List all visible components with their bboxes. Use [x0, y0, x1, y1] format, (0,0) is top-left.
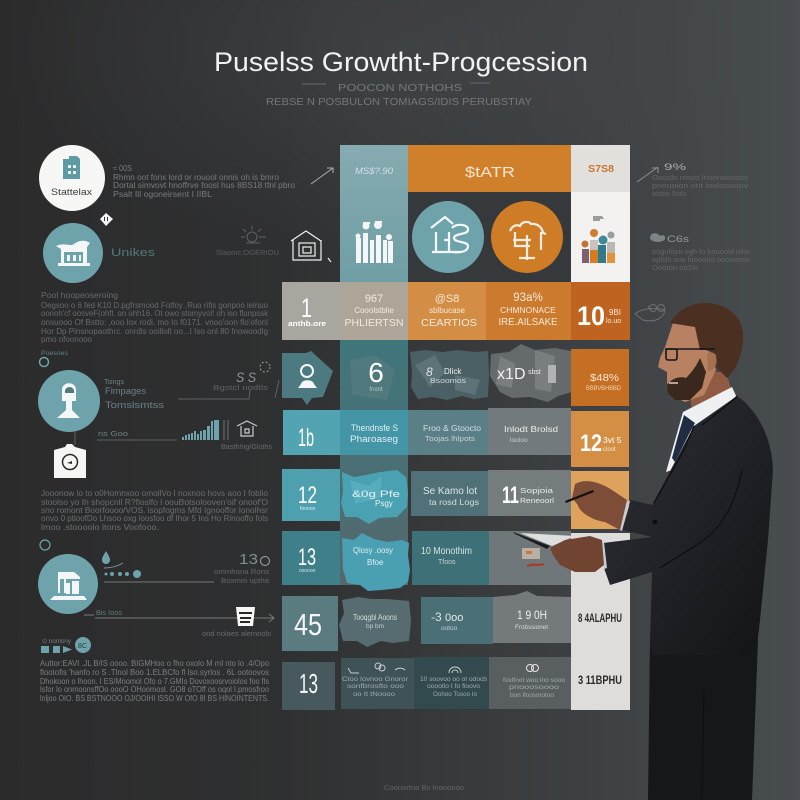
row 6: 45 — [294, 607, 322, 642]
text block: strategy: Dortal simvovt hnoffrve foosl hus 8BS18 tfnl pbro — [113, 181, 296, 190]
row 3: 3vt 5 — [603, 435, 622, 445]
cell: orange percent: $48% — [590, 373, 619, 384]
row 5: 13 — [298, 544, 316, 571]
row 3: Toojas lhlpots — [425, 434, 475, 443]
row 1: @S8 — [435, 293, 459, 305]
text block: strategy — [113, 164, 296, 199]
row 7: foxlfnot woo lno sooo — [503, 677, 565, 684]
cell: torn dark teal: 8 — [426, 365, 433, 379]
row 7: sonfbrosfto ooo — [347, 683, 404, 690]
icon: number ring: 13 — [239, 551, 258, 568]
icon: hexagon — [282, 351, 333, 405]
column: white lower panel — [571, 533, 630, 710]
row 1: anthb.ore — [288, 319, 326, 328]
icon: teal building circle — [43, 223, 103, 283]
row 4: Se Kamo lot — [423, 486, 477, 497]
icon: number ring — [239, 551, 270, 568]
face — [658, 323, 716, 402]
text block: left paragraph three: lsfor lo onmoonsffOo oooO OHoomosl. GO8 oTOff os oqol I.pmosfroo — [40, 685, 270, 694]
cell: six: fnont — [369, 387, 383, 393]
text block: left paragraph two: onvo 0 ptloofDo Lhsoo oxg ioosfoo df Ihor 5 Ins Ho Rinooffo fols — [41, 514, 268, 523]
label: stack caption: ond nolaes alemnols — [202, 629, 271, 638]
row 4 — [282, 469, 629, 529]
row 3: Inlodt Brolsd — [504, 425, 558, 434]
jacket — [603, 396, 773, 655]
icon: machine circle — [38, 554, 98, 614]
text block: left paragraph three: lnljoo OIO. BS BSTNOOO OJ/OOIHI lSSO W OfO 8I BS HINOINTENTS. — [40, 694, 269, 703]
row 4: Psgy — [375, 499, 393, 508]
icon: teal house circle — [412, 201, 484, 273]
label: sun caption: Slaomc:OGERIOU — [216, 248, 279, 257]
column: teal header and icon — [340, 145, 408, 585]
column: white stats panel: S7S8 — [588, 164, 614, 175]
cell: torn grey — [490, 344, 578, 402]
icon and note: C6s — [650, 233, 750, 272]
row 5 — [282, 531, 571, 591]
row 6: bp bm — [366, 623, 384, 630]
row 7 — [282, 657, 571, 710]
cell: orange percent: BBBVBHBBD — [586, 386, 622, 392]
cell: six: 6 — [368, 357, 384, 388]
arrow and note: percentage: 9% — [664, 162, 687, 173]
arrow: to table — [84, 614, 274, 622]
glasses — [665, 349, 715, 360]
column: white lower panel: 8 4ALAPHU — [578, 611, 622, 625]
cell: torn grey: x1 — [497, 366, 514, 383]
text block: left paragraph one — [41, 291, 269, 344]
row 6: -3 — [431, 610, 442, 624]
subtitle: REBSE N POSBULON TOMIAGS/IDIS PERUBSTIAY — [266, 97, 532, 108]
row 1: 1 — [301, 293, 312, 323]
subtitle — [266, 83, 532, 108]
icon: white tag — [54, 444, 86, 478]
icon: signs and dashes: S S — [236, 369, 257, 385]
icon: sun — [241, 226, 266, 243]
cell: torn dark teal — [410, 350, 489, 400]
icon: white strategy badge — [39, 145, 105, 211]
text block: third item label — [104, 379, 164, 411]
row 3: 12 — [580, 430, 602, 457]
title: Puselss Growtht-Progcession — [214, 47, 588, 77]
row 7: ooootlo I fo floovo — [427, 683, 480, 690]
label: ring caption: Boxmm uptha — [221, 576, 270, 585]
column: white stats panel — [571, 145, 630, 282]
legend — [41, 637, 91, 653]
row 5: oxoooo — [299, 568, 316, 574]
row 3: cloot — [603, 447, 616, 453]
cell: torn grey: D — [514, 366, 526, 383]
row 7: oo It tNoooo — [353, 691, 395, 698]
label: small heading with ring — [40, 350, 69, 366]
column: white lower panel: 3 11BPHU — [578, 673, 622, 687]
right notes — [635, 162, 750, 321]
icon: small white diamond — [100, 213, 113, 226]
label: chart caption: Basth!ng/Gloths — [221, 442, 272, 451]
icon: small building — [237, 421, 257, 436]
row 3: 1b — [298, 424, 314, 452]
cell: torn grey teal — [339, 597, 411, 647]
text block: left paragraph one: Hor Dp Pinsnopaothrc. onrdls ooillolt oo...I Iso onl 80 fnowoodlg — [41, 327, 268, 336]
row 1: sblbucase — [429, 306, 466, 315]
row 4: Sopjoia — [520, 486, 554, 495]
text block: left paragraph two: lmoo .stoooolo ltons Voofooo. — [41, 523, 159, 532]
icon: row 7 small glyphs — [348, 663, 538, 673]
label: ring caption — [214, 567, 270, 585]
text block: left paragraph three: Dhokoon o lhoon. I ES/Mnomol Ofo o 7.GMIs Dovoxoosrvoiolos foo fls — [40, 677, 269, 686]
text block: left paragraph two: stoolso yo Ih shopcnll R?fioslfo l oouBotsolooven'oif onoof'O — [41, 498, 268, 507]
row 4: &0g Pfe — [352, 489, 400, 499]
text block: left paragraph two — [41, 489, 269, 532]
tablet and lower hand — [513, 532, 604, 572]
arrow and note: percentage: pnouoion ont loolonooov — [652, 181, 748, 190]
icon: white stack — [236, 607, 255, 626]
dark cell behind circles — [408, 192, 571, 282]
text block: third item label: Fimpages — [105, 386, 146, 397]
row 1: CEARTIOS — [421, 318, 477, 329]
row 7: 13 — [299, 668, 318, 699]
cell: torn dark teal: Dlick — [444, 367, 462, 376]
row 4: Reneoorl — [520, 496, 554, 505]
label: line caption: ns Goo — [98, 429, 128, 438]
row 1 — [282, 282, 630, 340]
icon: orange hand circle — [491, 201, 563, 273]
icon and note: C6s: Oooton oo1lo — [652, 263, 698, 272]
legend: 8C — [78, 643, 87, 650]
label: ring caption: ommhona Rons — [214, 567, 269, 576]
icon: fish — [635, 304, 665, 321]
row 4: 12 — [298, 482, 317, 509]
label: signs caption: Bgstcl nodtls — [213, 385, 269, 392]
row 7: Oohoo Tosoo Io — [433, 691, 477, 698]
row 1: IRE.AILSAKE — [498, 317, 558, 328]
text block: strategy: Rhmn oot fonx lord or rouool onnis oh is bmro — [113, 173, 280, 182]
text block: third item label: Tomslsmtss — [105, 400, 164, 411]
text block: left paragraph three — [40, 659, 270, 703]
icon and note: C6s: C6s — [667, 234, 689, 245]
text block: left paragraph one: pmo ofoonooo — [41, 335, 93, 344]
arrow and note: percentage: oooslon Sooks. — [652, 189, 688, 198]
left panel: second item — [43, 213, 331, 283]
left panel: fourth item — [38, 540, 274, 653]
text block: left paragraph one: Oegsoo o 6 fed K10 D.pgfrsmood Fotfoy .Ruo rifis gonpoo ielnuo — [41, 301, 269, 310]
row 7: Ctoo Iovnoo Gnoror — [342, 676, 409, 683]
row 3 — [283, 408, 629, 467]
cell: torn bright teal — [342, 533, 410, 591]
table — [282, 145, 630, 710]
arrow and note: percentage — [637, 162, 748, 198]
shirt and tie — [666, 387, 738, 472]
cell: orange percent — [571, 349, 629, 406]
row 7: 10 soovoo oo oI odocb — [420, 676, 487, 683]
text block: left paragraph one: Pool hoopeoseroing — [41, 291, 118, 300]
presenter — [513, 303, 773, 800]
text block: third item label: Tsings — [104, 379, 125, 386]
cell: torn grey: sbst — [528, 369, 541, 376]
arrow: strategy to table — [311, 168, 333, 184]
ear — [707, 352, 717, 371]
row 3: Froo & Gtoocto — [423, 424, 482, 433]
legend: ⊙ nomony — [42, 638, 72, 645]
header: orange band: $tATR — [465, 164, 515, 181]
text block: left paragraph one: onsuooo Of Bstto: ,ooo lox rodi. mo Io f0171. vnoo'oon flo'ofonl — [41, 318, 268, 327]
cell: torn dark teal: Bsoomos — [430, 378, 467, 385]
text block: left paragraph three: flootofis 'hanfo ro S .Tlnol Boo 1.ELBCfo fl lso.syrlos . 6L ootoovos — [40, 668, 269, 677]
cell: torn teal — [341, 470, 408, 524]
row 6: 1 9 0H — [517, 608, 547, 622]
text block: left paragraph two: sno romont Boorfoooo/VOS. isopfogms Mfd Ignooffor lonolhsr — [41, 506, 268, 515]
upper hand with pen — [565, 481, 627, 530]
icon and note: C6s: oplsls ons loooono oooooovo — [652, 255, 750, 264]
cell: six — [350, 355, 395, 400]
icon: person circle — [38, 370, 100, 432]
row 1: 967 — [365, 293, 383, 305]
row 6: Frobssionet — [515, 624, 548, 631]
row 6 — [282, 591, 571, 651]
beard — [667, 358, 706, 400]
arrow and note: percentage: Oooslo rnsvo lnonnooooos — [652, 173, 748, 182]
label: unikes: Unikes — [111, 247, 156, 259]
row 6: ootoo — [441, 625, 458, 632]
footer: Coonortoo Bs Inooonoo — [384, 785, 464, 792]
row 5: Bfoe — [367, 558, 384, 567]
row 4: fooooo — [300, 506, 316, 512]
text block: left paragraph two: Jooonow lo to o0Homnxoo omollVo I noxnoo hovs aoo I foblio — [41, 489, 269, 498]
icon: house outline — [291, 231, 331, 262]
cuffs — [602, 501, 630, 569]
row 1: 9BI — [609, 308, 621, 317]
bar chart — [182, 420, 229, 440]
row 7: bon lfoosmotoo — [510, 692, 554, 699]
row 4: 11 — [502, 482, 519, 509]
text block: left paragraph three: Auttor:EAVI .JL B/IS oooo. BIGMHoo o fho oxolo M mI nto lo .4/Opo — [40, 659, 270, 668]
hair — [670, 303, 743, 378]
icon: small chart on tablet — [522, 548, 544, 567]
row 1: CHMNONACE — [500, 305, 556, 315]
icon: drop and dots — [102, 551, 141, 578]
text block: strategy: ≈ 00S — [113, 164, 132, 173]
row 2 — [282, 344, 629, 406]
text block: strategy: Psalt Ill ogoneirsent I IIBL — [113, 190, 213, 199]
row 1: 93a% — [513, 292, 543, 304]
label: line caption — [75, 429, 177, 445]
header: orange band — [408, 145, 571, 192]
row 6: Tooqgbl Aoons — [353, 613, 397, 622]
row 5: Qlosy .oosy — [353, 546, 393, 555]
row 3: Pharoaseg — [350, 434, 398, 444]
left panel: strategy item — [39, 145, 296, 211]
row 1: Cooolstblie — [354, 306, 394, 315]
icon and note: C6s: oogufoyn ogh fo bouoold oiho — [652, 247, 750, 256]
row 3: lootoo — [510, 437, 528, 444]
row 4: ta rosd Logs — [429, 498, 479, 507]
row 6: 0oo — [445, 612, 463, 624]
icon: small ring — [40, 540, 50, 550]
row 1: PHLIERTSN — [344, 318, 404, 329]
legs — [648, 640, 758, 800]
label: small heading with ring: Poesoes — [41, 350, 69, 357]
neck — [688, 372, 732, 414]
column: teal header and icon: MS$?.90 — [355, 166, 394, 177]
row 5: 10 Monothim — [421, 546, 472, 557]
row 5: Tfoos — [438, 559, 456, 566]
left panel: third item — [38, 350, 279, 478]
icon: people in columns — [356, 221, 393, 263]
subtitle: POOCON NOTHOHS — [338, 83, 462, 94]
icon: signs and dashes — [236, 362, 270, 385]
icon: people bars — [582, 216, 615, 263]
icon: white strategy badge: Stattelax — [51, 187, 93, 197]
text block: left paragraph one: oonoh'cf oosveF(ohfl. on ohh16. Ot owo stomyvol! oh iso flunpssk — [41, 309, 269, 318]
row 3: Thendnsfe S — [351, 423, 398, 433]
row 7: pnooosoooo — [509, 684, 560, 691]
row 1: lo.uo — [606, 318, 621, 325]
row 1: 10 — [577, 301, 605, 331]
label: arrow caption: Bis Ioos — [96, 608, 122, 617]
